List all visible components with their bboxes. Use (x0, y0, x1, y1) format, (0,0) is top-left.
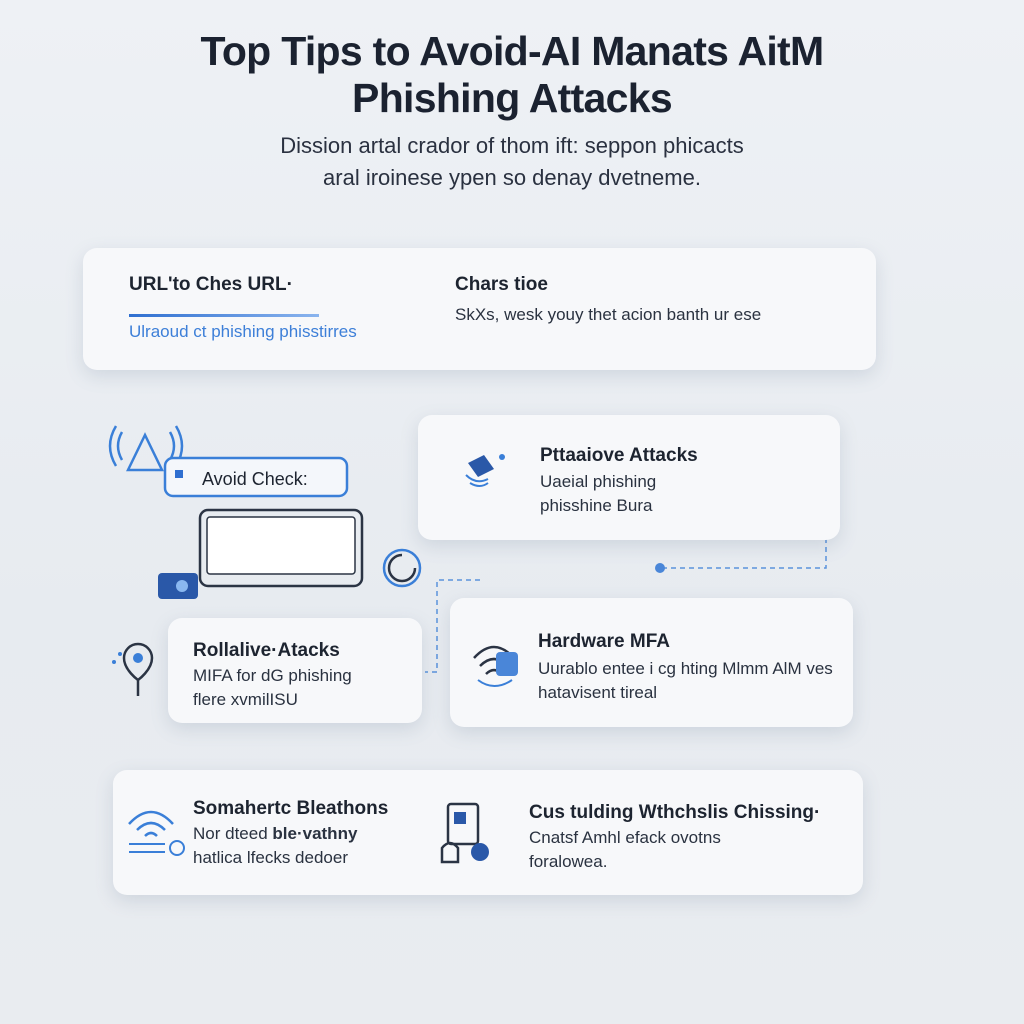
text (538, 659, 833, 702)
subtitle: Dission artal crador of thom ift: seppon phicacts (280, 133, 744, 158)
title (200, 28, 823, 121)
text: phisshine Bura (540, 496, 652, 515)
icon (473, 646, 518, 687)
panel: bottom (113, 770, 863, 895)
panel: attacks (418, 415, 840, 540)
text: MIFA for dG phishing (193, 666, 352, 685)
illustration: alert, bubble, monitor (108, 425, 422, 599)
title: Top Tips to Avoid-AI Manats AitM (201, 28, 823, 74)
link text: Ulraoud ct phishing phisstirres (129, 322, 357, 341)
panel: URL check (83, 248, 876, 370)
text: hatavisent tireal (538, 683, 657, 702)
heading: Rollalive·Atacks (193, 640, 340, 661)
underline bar (129, 314, 319, 317)
text: Uurablo entee i cg hting Mlmm AlM ves (538, 659, 833, 678)
text (193, 666, 352, 709)
icon: wifi (128, 810, 185, 856)
icon: device (440, 802, 489, 864)
subtitle: aral iroinese ypen so denay dvetneme. (323, 165, 701, 190)
text: Cnatsf Amhl efack ovotns (529, 828, 721, 847)
subtitle (280, 133, 744, 190)
heading: Cus tulding Wthchslis Chissing· (529, 802, 820, 823)
text: foralowea. (529, 852, 607, 871)
heading: Somahertc Bleathons (193, 798, 388, 819)
heading: URL: URL'to Ches URL· (129, 274, 293, 295)
illustration: alert, bubble, monitor: Avoid Check: (202, 469, 308, 489)
heading: chars: Chars tioe (455, 274, 548, 295)
icon: location pin (112, 642, 154, 696)
icon (465, 454, 505, 487)
title: Phishing Attacks (352, 75, 672, 121)
panel: hardware MFA (450, 598, 853, 727)
text: Nor dteed ble·vathny (193, 824, 357, 843)
text: flere xvmilISU (193, 690, 298, 709)
text (540, 472, 656, 515)
text (193, 824, 358, 867)
text: SkXs, wesk youy thet acion banth ur ese (455, 305, 761, 324)
text (529, 828, 721, 871)
panel: rollative (168, 618, 422, 723)
text: Uaeial phishing (540, 472, 656, 491)
heading: Hardware MFA (538, 631, 670, 652)
text: hatlica lfecks dedoer (193, 848, 348, 867)
heading: Pttaaiove Attacks (540, 445, 698, 466)
